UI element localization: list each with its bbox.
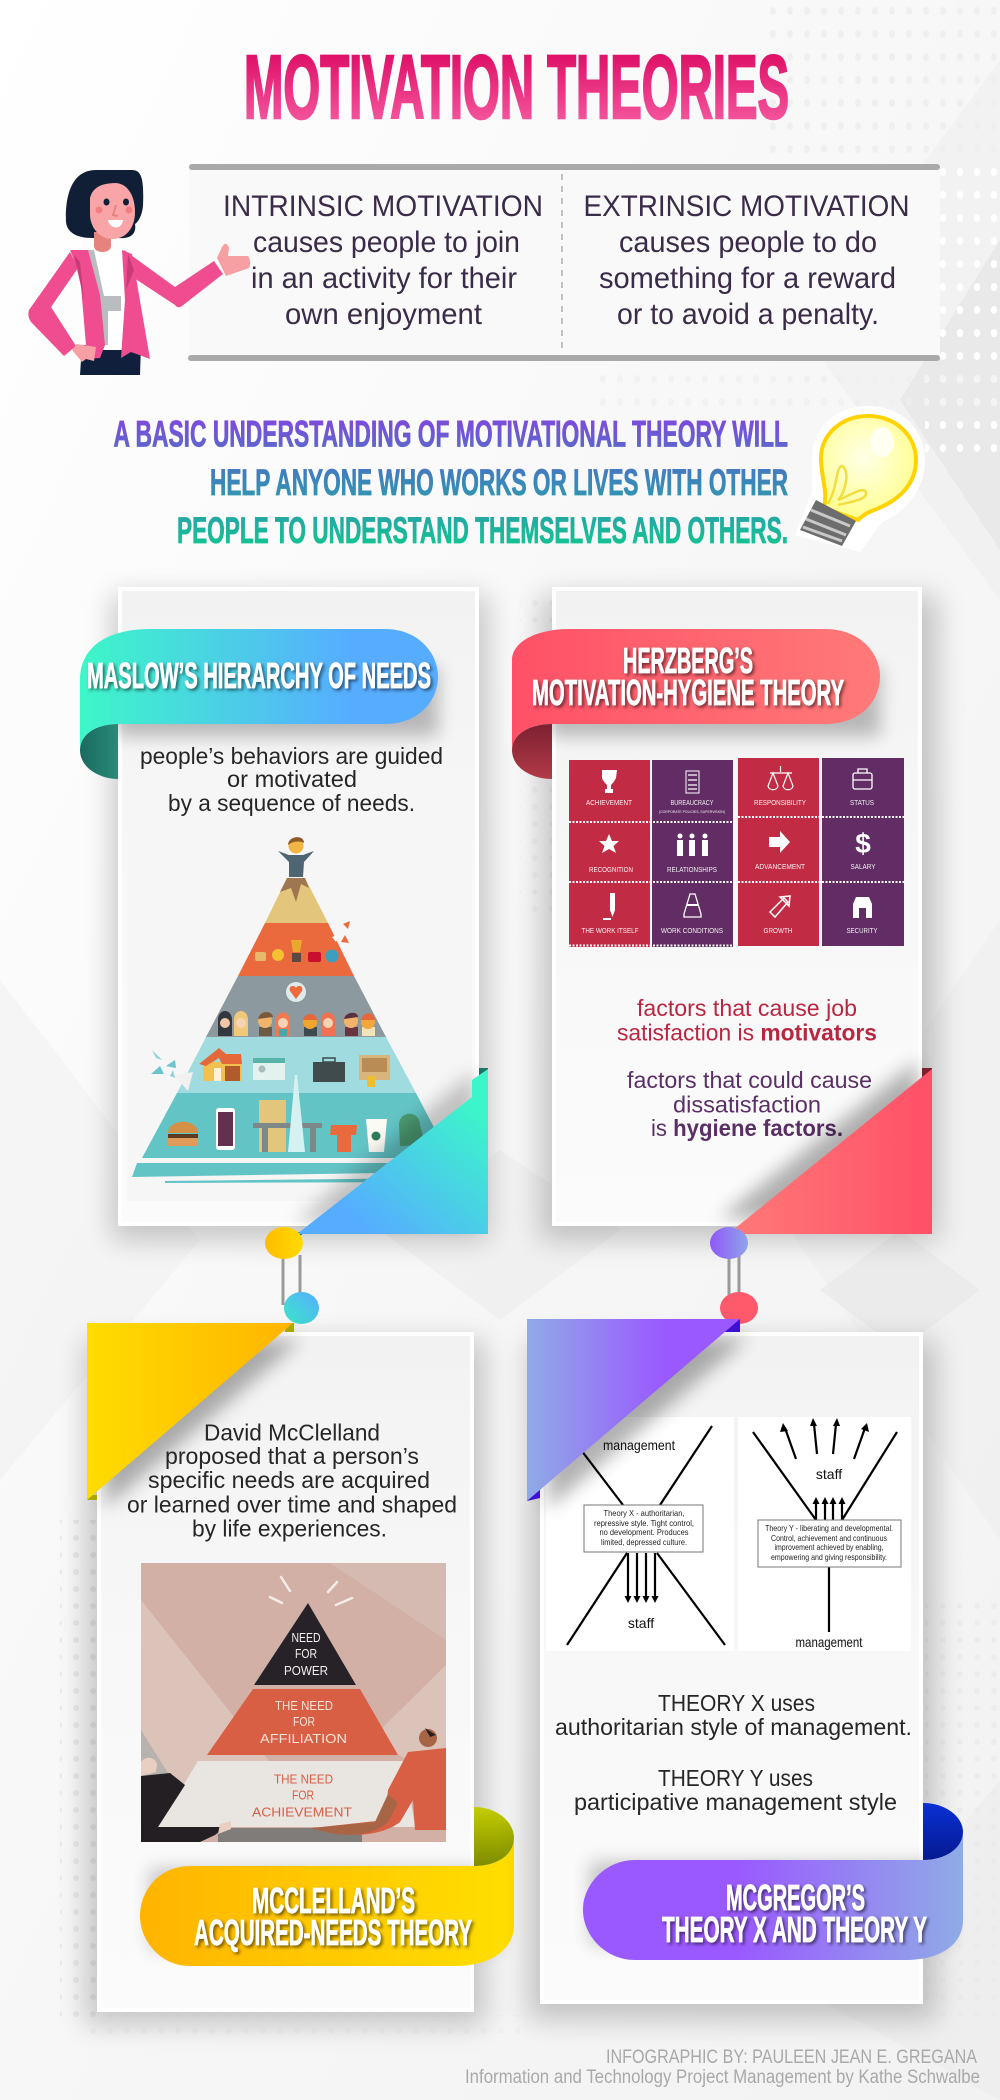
hygiene factors text: is hygiene factors. bbox=[651, 1115, 843, 1141]
chart: Theory X diagram: no development. Produces bbox=[600, 1527, 688, 1537]
pyramid tier: love and belonging bbox=[206, 976, 386, 1037]
tile icons: $ bbox=[855, 828, 871, 859]
description: David McClelland bbox=[204, 1420, 380, 1446]
ribbon heading bbox=[583, 1803, 963, 1960]
card body bbox=[542, 1334, 921, 2002]
tile labels: GROWTH bbox=[764, 926, 792, 935]
shirt bbox=[90, 250, 124, 350]
description bbox=[555, 1690, 912, 1815]
paper shards bbox=[151, 921, 350, 1091]
tier: need for achievement: FOR bbox=[292, 1788, 314, 1802]
folded corner bbox=[527, 1319, 748, 1509]
motivators text: factors that cause job bbox=[637, 995, 857, 1021]
chart: Theory X diagram: staff bbox=[628, 1615, 654, 1631]
description: participative management style bbox=[574, 1789, 897, 1815]
tile labels: STATUS bbox=[850, 798, 874, 807]
card shadow bbox=[540, 595, 938, 1240]
intrinsic text bbox=[223, 190, 543, 331]
motivators text bbox=[617, 995, 877, 1046]
ribbon heading bbox=[512, 629, 880, 779]
card body bbox=[120, 589, 477, 1224]
jacket left arm bbox=[28, 252, 78, 356]
card shadow bbox=[528, 1340, 936, 2020]
bottom bar bbox=[188, 355, 940, 361]
tile labels: THE WORK ITSELF bbox=[582, 926, 639, 935]
intrinsic text: own enjoyment bbox=[285, 298, 483, 331]
chart: Theory Y diagram: management bbox=[796, 1634, 863, 1650]
tile labels: RECOGNITION bbox=[589, 865, 633, 874]
tile labels bbox=[582, 798, 878, 935]
card shadow bbox=[112, 595, 488, 1240]
tile labels: ADVANCEMENT bbox=[755, 862, 805, 871]
figure on summit bbox=[278, 837, 314, 877]
chart: Theory Y diagram: staff bbox=[816, 1466, 842, 1482]
ribbon heading: MCGREGOR’S bbox=[726, 1877, 865, 1918]
motivators text: satisfaction is motivators bbox=[617, 1020, 877, 1046]
right hand thumbs up bbox=[217, 244, 250, 276]
description: THEORY Y uses bbox=[658, 1765, 813, 1791]
card shadow bbox=[85, 1340, 485, 2025]
folded corner bbox=[87, 1323, 301, 1508]
panel: Herzberg's motivation-hygiene theory bbox=[512, 589, 938, 1240]
jacket right body bbox=[121, 250, 150, 359]
tier: need for achievement: ACHIEVEMENT bbox=[252, 1806, 352, 1820]
description: proposed that a person’s bbox=[165, 1443, 419, 1469]
description: by a sequence of needs. bbox=[168, 790, 415, 816]
credits bbox=[465, 2047, 980, 2088]
hair back bbox=[66, 170, 143, 238]
pyramid tier: safety bbox=[177, 1037, 416, 1093]
hygiene factors text: factors that could cause bbox=[627, 1067, 872, 1093]
tile labels: WORK CONDITIONS bbox=[661, 926, 723, 935]
tile labels: BUREAUCRACY bbox=[670, 798, 714, 807]
extrinsic text: causes people to do bbox=[619, 226, 877, 259]
intrinsic text: INTRINSIC MOTIVATION bbox=[223, 190, 543, 223]
shirt grey band bbox=[88, 250, 121, 345]
description: or learned over time and shaped bbox=[127, 1492, 457, 1518]
intrinsic text: causes people to join bbox=[253, 226, 520, 259]
pyramid tier: self-actualization bbox=[265, 878, 328, 923]
tile labels: RELATIONSHIPS bbox=[667, 865, 717, 874]
panel: McGregor's Theory X and Theory Y bbox=[527, 1319, 963, 2020]
description: by life experiences. bbox=[192, 1516, 387, 1542]
illustration: presenter woman bbox=[28, 170, 250, 375]
tile labels: RESPONSIBILITY bbox=[754, 798, 806, 807]
figure: person in orange shirt bbox=[312, 1728, 446, 1835]
ribbon heading: ACQUIRED-NEEDS THEORY bbox=[194, 1912, 472, 1953]
tile icons bbox=[599, 766, 872, 920]
chart: Theory X diagram: management bbox=[603, 1437, 675, 1453]
intrinsic text: in an activity for their bbox=[251, 262, 517, 295]
chart: Theory Y diagram: empowering and giving responsibility. bbox=[771, 1552, 887, 1562]
jacket left body bbox=[70, 250, 105, 359]
description: THEORY X uses bbox=[658, 1690, 815, 1716]
description bbox=[127, 1420, 457, 1542]
ribbon heading bbox=[140, 1807, 514, 1966]
face bbox=[90, 183, 135, 239]
figure: person in black bbox=[141, 1758, 231, 1842]
left hand bbox=[72, 344, 96, 362]
card body bbox=[99, 1334, 472, 2010]
extrinsic text: EXTRINSIC MOTIVATION bbox=[584, 190, 910, 223]
eyes and smile bbox=[96, 198, 132, 228]
pyramid tier: physiological bbox=[132, 1075, 450, 1183]
extrinsic text: something for a reward bbox=[599, 262, 896, 295]
hygiene factors text: dissatisfaction bbox=[673, 1092, 821, 1118]
tile labels: SALARY bbox=[850, 862, 876, 871]
pants bbox=[80, 345, 141, 375]
tier: need for affiliation: THE NEED bbox=[275, 1699, 333, 1713]
chart: Theory X diagram: limited, depressed culture. bbox=[601, 1537, 687, 1547]
description bbox=[140, 743, 443, 816]
ribbon heading: MCCLELLAND’S bbox=[252, 1880, 415, 1921]
tier: need for power: FOR bbox=[295, 1647, 317, 1661]
tier: need for power: POWER bbox=[284, 1664, 328, 1678]
hygiene factors text bbox=[627, 1067, 872, 1141]
ribbon heading bbox=[80, 629, 438, 779]
extrinsic text bbox=[584, 190, 910, 331]
panel: Maslow's hierarchy of needs bbox=[80, 589, 488, 1240]
chart: Theory Y diagram: Control, achievement and continuous bbox=[771, 1533, 887, 1543]
tier: need for power: NEED bbox=[292, 1631, 320, 1645]
panel: intrinsic and extrinsic motivation bbox=[188, 164, 940, 361]
tier: need for affiliation: AFFILIATION bbox=[260, 1732, 347, 1746]
tier: need for achievement bbox=[158, 1761, 415, 1827]
neck bbox=[94, 232, 111, 252]
illustration: needs pyramid bbox=[141, 1563, 446, 1842]
tier: need for achievement: THE NEED bbox=[274, 1772, 333, 1786]
ribbon heading: HERZBERG’S bbox=[623, 640, 753, 681]
card body bbox=[554, 589, 920, 1224]
tier: need for affiliation: FOR bbox=[293, 1715, 315, 1729]
tier: need for affiliation bbox=[207, 1689, 398, 1755]
icon: light bulb bbox=[795, 406, 925, 552]
chart: Theory X diagram: repressive style. Tight control, bbox=[594, 1518, 694, 1528]
tile labels: (CORPORATE POLICIES, SUPERVISION) bbox=[659, 810, 725, 814]
connector: Maslow to McClelland bbox=[265, 1227, 319, 1324]
tile labels: ACHIEVEMENT bbox=[586, 798, 632, 807]
folded corner bbox=[291, 1068, 488, 1236]
tier: need for power bbox=[254, 1603, 356, 1685]
description: specific needs are acquired bbox=[148, 1467, 430, 1493]
top bar bbox=[189, 164, 940, 170]
panel: McClelland's acquired-needs theory bbox=[85, 1323, 514, 2025]
chart: Theory Y diagram: improvement achieved by enabling, bbox=[774, 1542, 884, 1552]
connector: Herzberg to McGregor bbox=[710, 1227, 758, 1324]
chart: Theory X diagram: Theory X - authoritarian, bbox=[604, 1508, 684, 1518]
chart: needs pyramid bbox=[127, 816, 472, 1201]
jacket right arm bbox=[124, 250, 223, 307]
extrinsic text: or to avoid a penalty. bbox=[617, 298, 879, 331]
description: or motivated bbox=[227, 766, 357, 792]
description: authoritarian style of management. bbox=[555, 1714, 912, 1740]
description: people’s behaviors are guided bbox=[140, 743, 443, 769]
pyramid tier: esteem bbox=[238, 923, 354, 976]
ribbon heading: MASLOW’S HIERARCHY OF NEEDS bbox=[87, 655, 431, 696]
tile labels: SECURITY bbox=[846, 926, 878, 935]
chart: Theory Y diagram: Theory Y - liberating and developmental. bbox=[765, 1523, 893, 1533]
chart: factor tiles bbox=[569, 758, 904, 947]
chart: Theory Y diagram bbox=[738, 1417, 911, 1651]
folded corner bbox=[720, 1061, 932, 1234]
statement: understanding motivational theory bbox=[114, 414, 788, 551]
chart: Theory X diagram bbox=[546, 1417, 734, 1651]
